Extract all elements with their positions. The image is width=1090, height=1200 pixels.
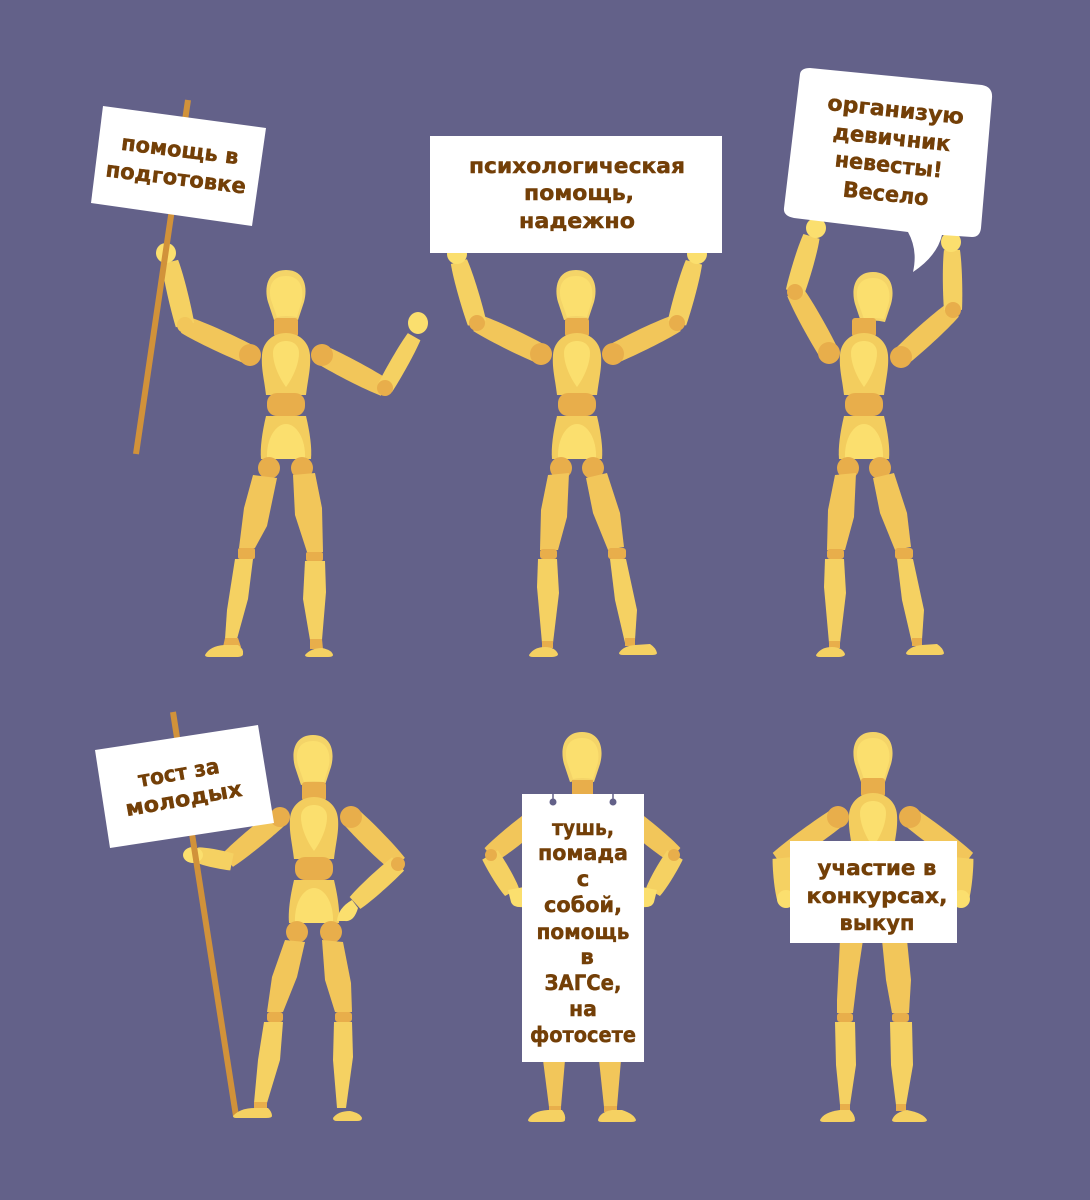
neck [572, 780, 593, 800]
sign: toast to the newlyweds: тост за [136, 754, 221, 793]
figure 6: mannequin holding sign at chest [772, 732, 974, 1122]
arm: left [447, 244, 552, 365]
legs [233, 921, 362, 1121]
torso [552, 318, 602, 459]
head [266, 270, 306, 320]
sign: mascara, lipstick, registry office help: помощь [536, 920, 630, 945]
sign: contests and ransom [790, 841, 957, 943]
torso [848, 778, 898, 919]
arm: right [890, 232, 963, 368]
sign: mascara, lipstick, registry office help: в [580, 945, 594, 970]
sign: help with preparation [91, 106, 266, 226]
speech bubble sign: девичник [832, 120, 952, 157]
figure 4: mannequin with pole and toast sign [95, 712, 406, 1121]
legs [529, 457, 657, 657]
head [562, 732, 602, 782]
arm: right on hip [619, 807, 683, 907]
speech bubble sign [784, 68, 992, 272]
sign: psychological help [430, 136, 722, 253]
sign: contests and ransom: участие в [818, 856, 936, 881]
sign: help with preparation: подготовке [104, 158, 247, 200]
torso [261, 318, 311, 459]
sign: mascara, lipstick, registry office help: собой, [544, 893, 622, 918]
sign: contests and ransom: выкуп [840, 911, 914, 936]
sign: mascara, lipstick, registry office help: помада [538, 841, 628, 866]
legs [205, 457, 333, 657]
arm: right on hip [337, 806, 406, 921]
torso [289, 782, 339, 923]
figure 2: mannequin holding banner overhead [430, 136, 722, 657]
head [556, 270, 596, 320]
sign: help with preparation: помощь в [120, 131, 240, 170]
torso [839, 318, 889, 459]
sign: toast to the newlyweds [95, 725, 274, 848]
arm: left [772, 806, 849, 908]
arm: right bent [311, 312, 428, 397]
speech bubble sign: невесты! [834, 147, 944, 184]
arm: left raised [156, 243, 261, 366]
sign: psychological help: помощь, [524, 181, 634, 206]
sign: psychological help: психологическая [469, 154, 685, 179]
head [853, 272, 893, 322]
legs [528, 1060, 636, 1122]
sign: mascara, lipstick, registry office help: на [569, 997, 597, 1022]
sign: mascara, lipstick, registry office help: с [577, 867, 589, 892]
figure 1: mannequin with pole sign [91, 100, 428, 657]
sign: contests and ransom: конкурсах, [806, 884, 948, 909]
sign: mascara, lipstick, registry office help: фотосете [530, 1023, 636, 1048]
arm: left [785, 218, 840, 364]
figure 5: mannequin wearing sandwich board [482, 732, 683, 1122]
speech bubble sign: организую [826, 91, 965, 130]
head [853, 732, 893, 782]
arm: left on hip [482, 807, 547, 907]
sign: mascara, lipstick, registry office help: тушь, [552, 816, 614, 841]
head [293, 735, 333, 785]
arm: right [899, 806, 974, 908]
arm: left holding pole [183, 807, 290, 871]
pole [136, 100, 188, 454]
sign: mascara, lipstick, registry office help [522, 794, 644, 1062]
sign: mascara, lipstick, registry office help: ЗАГСе, [544, 971, 622, 996]
sign: psychological help: надежно [519, 209, 635, 234]
legs [816, 457, 944, 657]
pole [173, 712, 236, 1116]
sign: toast to the newlyweds: молодых [124, 777, 244, 822]
figure 3: mannequin holding speech bubble [784, 68, 992, 657]
speech bubble sign: Весело [842, 178, 930, 211]
arm: right [602, 244, 707, 365]
legs [820, 940, 927, 1122]
